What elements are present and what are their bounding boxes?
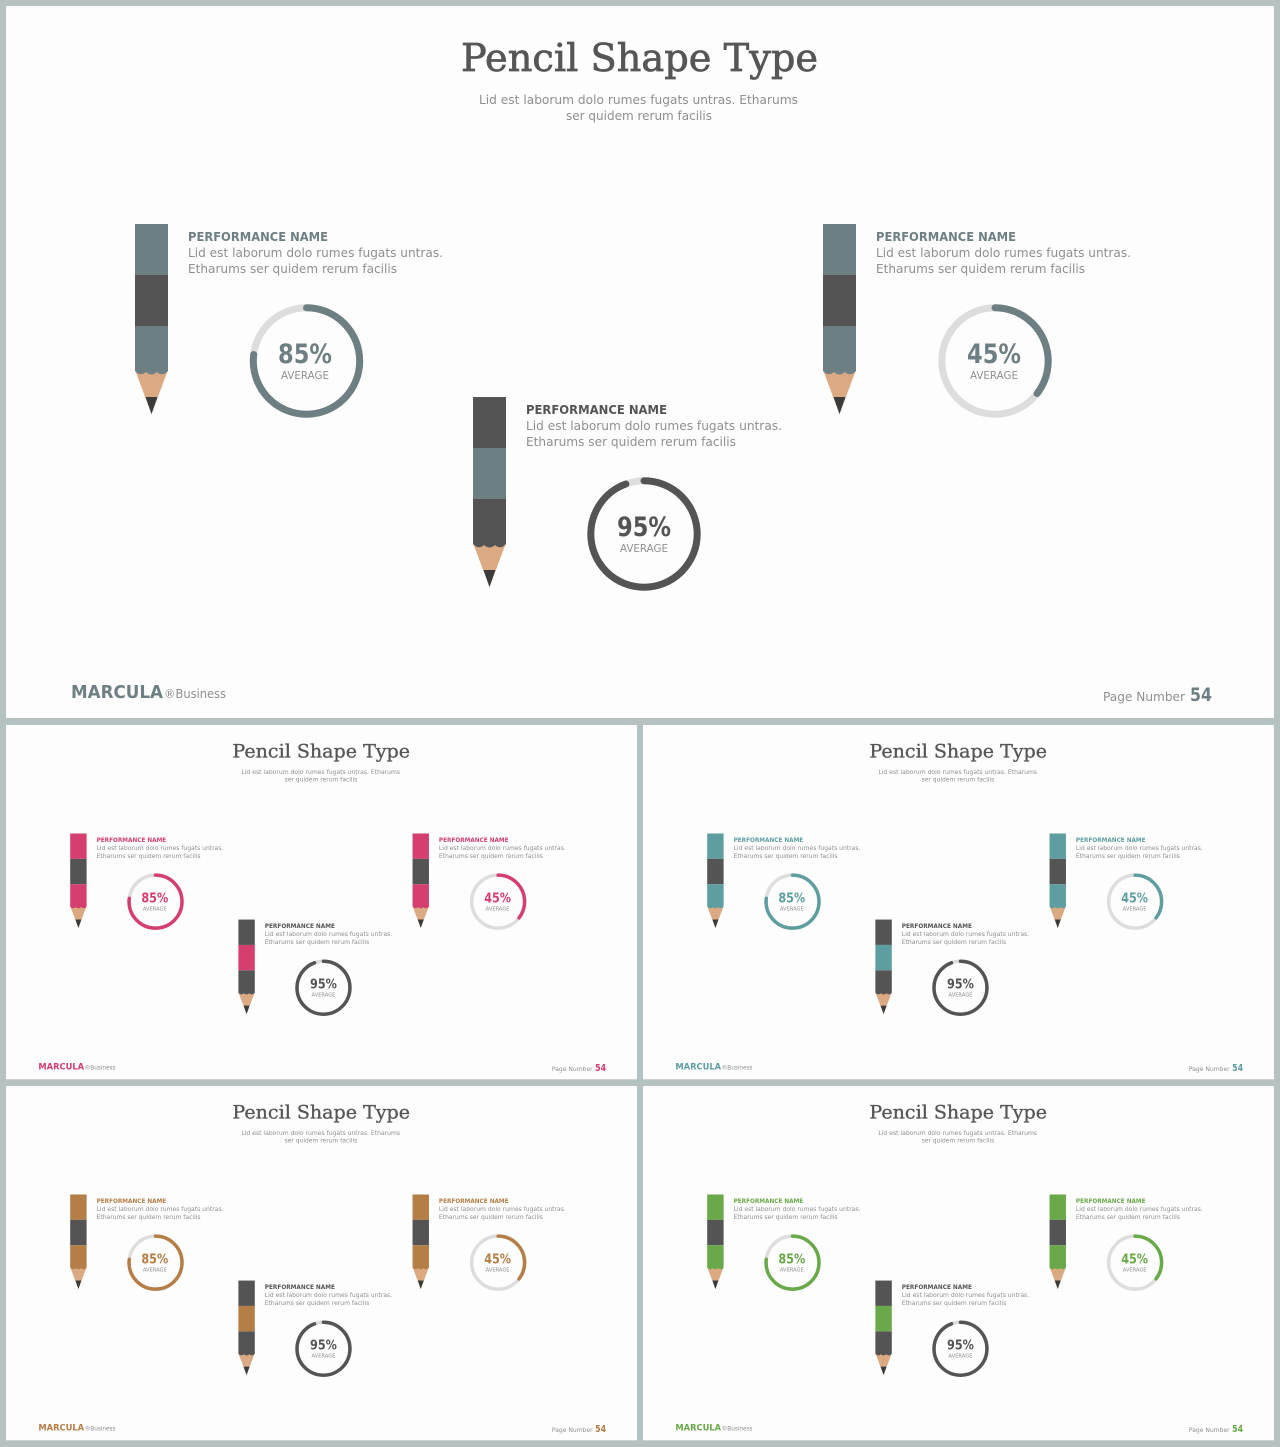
icon: pencil left (135, 224, 168, 414)
text block: performance center: Lid est laborum dolo rumes fugats untras. (265, 1292, 392, 1299)
chart: ring 95% (591, 481, 697, 587)
panel: green slide (643, 1086, 1274, 1440)
chart: ring 95%: 95% (310, 978, 337, 993)
icon: pencil right (823, 224, 856, 414)
text block: performance right: PERFORMANCE NAME (876, 230, 1016, 244)
page number: Page Number (1103, 689, 1186, 704)
chart: ring 85% (766, 875, 819, 928)
text block: performance center (265, 923, 392, 946)
icon: pencil left (70, 833, 87, 928)
chart: ring 95%: 95% (947, 978, 974, 993)
chart: ring 45%: 45% (1121, 1253, 1149, 1268)
text block: performance right: Lid est laborum dolo rumes fugats untras. (876, 245, 1131, 260)
subtitle: ser quidem rerum facilis (285, 1138, 357, 1145)
logo (675, 1062, 752, 1072)
logo: MARCULA (71, 682, 163, 703)
text block: performance left: PERFORMANCE NAME (734, 837, 803, 844)
page number: 54 (595, 1424, 606, 1435)
text block: performance right: Etharums ser quidem rerum facilis (876, 261, 1085, 276)
logo: MARCULA (675, 1062, 721, 1072)
chart: ring 45% (1109, 1236, 1162, 1289)
page number (1189, 1424, 1243, 1435)
icon: pencil center (238, 920, 255, 1014)
logo: ®Business (85, 1424, 115, 1432)
logo (675, 1423, 752, 1433)
title: Pencil Shape Type (869, 740, 1047, 762)
text block: performance right (1076, 1198, 1203, 1221)
logo: ®Business (85, 1063, 115, 1071)
text block: performance left: PERFORMANCE NAME (734, 1198, 803, 1205)
text block: performance right: Lid est laborum dolo rumes fugats untras. (1076, 1206, 1203, 1213)
chart: ring 45% (942, 308, 1048, 414)
text block: performance left (188, 230, 443, 276)
title: Pencil Shape Type (232, 1101, 410, 1123)
text block: performance center: Etharums ser quidem rerum facilis (902, 1300, 1006, 1307)
text block: performance right: PERFORMANCE NAME (1076, 837, 1146, 844)
text block: performance left (97, 837, 223, 860)
logo: MARCULA (38, 1423, 84, 1433)
chart: ring 85%: AVERAGE (143, 907, 167, 913)
chart: ring 45%: AVERAGE (1123, 907, 1147, 913)
text block: performance right: Lid est laborum dolo rumes fugats untras. (1076, 845, 1203, 852)
chart: ring 45%: AVERAGE (486, 907, 510, 913)
chart: ring 45%: 45% (967, 339, 1021, 370)
subtitle: Lid est laborum dolo rumes fugats untras. Etharums (878, 769, 1037, 776)
chart: ring 85%: AVERAGE (143, 1268, 167, 1274)
icon: pencil left (707, 1194, 724, 1289)
chart: ring 85%: AVERAGE (281, 369, 329, 382)
chart: ring 85% (766, 1236, 819, 1289)
text block: performance left: PERFORMANCE NAME (97, 837, 166, 844)
logo (38, 1062, 115, 1072)
text block: performance center (902, 923, 1029, 946)
chart: ring 95%: 95% (617, 512, 671, 543)
chart: ring 45% (472, 875, 525, 928)
chart: ring 95%: AVERAGE (312, 993, 336, 999)
text block: performance left: PERFORMANCE NAME (97, 1198, 166, 1205)
chart: ring 85%: AVERAGE (780, 907, 804, 913)
text block: performance left (734, 1198, 860, 1221)
text block: performance left: Etharums ser quidem rerum facilis (97, 853, 201, 860)
text block: performance right: Lid est laborum dolo rumes fugats untras. (439, 1206, 566, 1213)
page number: Page Number (552, 1066, 593, 1073)
text block: performance right: Etharums ser quidem rerum facilis (439, 1214, 543, 1221)
page number: Page Number (1189, 1427, 1230, 1434)
title: Pencil Shape Type (461, 36, 818, 80)
text block: performance right: Lid est laborum dolo rumes fugats untras. (439, 845, 566, 852)
icon: pencil center (875, 1281, 892, 1375)
page number: 54 (1232, 1424, 1243, 1435)
logo (38, 1423, 115, 1433)
text block: performance center (526, 403, 782, 449)
chart: ring 85%: 85% (278, 339, 332, 370)
chart: ring 85% (129, 875, 182, 928)
text block: performance center: Etharums ser quidem rerum facilis (902, 939, 1006, 946)
subtitle: ser quidem rerum facilis (566, 108, 712, 123)
text block: performance left: Etharums ser quidem rerum facilis (734, 853, 838, 860)
icon: pencil center (473, 397, 506, 587)
subtitle: Lid est laborum dolo rumes fugats untras. Etharums (241, 769, 400, 776)
chart: ring 95%: AVERAGE (949, 1354, 973, 1360)
text block: performance center: Etharums ser quidem rerum facilis (265, 1300, 369, 1307)
chart: ring 95% (934, 961, 987, 1014)
text block: performance center (902, 1284, 1029, 1307)
panel: teal slide (643, 725, 1274, 1079)
chart: ring 45%: AVERAGE (486, 1268, 510, 1274)
chart: ring 45% (1109, 875, 1162, 928)
subtitle (241, 1130, 400, 1145)
subtitle (878, 769, 1037, 784)
page number: Page Number (552, 1427, 593, 1434)
page number: 54 (1232, 1063, 1243, 1074)
logo: ®Business (722, 1063, 752, 1071)
chart: ring 45%: 45% (484, 892, 512, 907)
chart: ring 45%: AVERAGE (970, 369, 1018, 382)
title: Pencil Shape Type (232, 740, 410, 762)
text block: performance left: Lid est laborum dolo rumes fugats untras. (734, 1206, 860, 1213)
chart: ring 95%: AVERAGE (312, 1354, 336, 1360)
page number (552, 1063, 606, 1074)
logo: ®Business (164, 686, 226, 701)
text block: performance right: Etharums ser quidem rerum facilis (1076, 1214, 1180, 1221)
page number: 54 (1190, 684, 1212, 706)
subtitle: ser quidem rerum facilis (922, 1138, 994, 1145)
chart: ring 45%: 45% (484, 1253, 512, 1268)
icon: pencil right (413, 833, 429, 928)
chart: ring 85%: 85% (141, 1253, 169, 1268)
text block: performance center: Etharums ser quidem rerum facilis (265, 939, 369, 946)
text block: performance right (439, 1198, 566, 1221)
chart: ring 85%: AVERAGE (780, 1268, 804, 1274)
text block: performance center (265, 1284, 392, 1307)
subtitle (878, 1130, 1037, 1145)
text block: performance right: Etharums ser quidem rerum facilis (439, 853, 543, 860)
text block: performance center: Etharums ser quidem rerum facilis (526, 434, 736, 449)
text block: performance right: PERFORMANCE NAME (439, 1198, 509, 1205)
text block: performance right: PERFORMANCE NAME (439, 837, 509, 844)
text block: performance left: Lid est laborum dolo rumes fugats untras. (97, 1206, 223, 1213)
chart: ring 95%: AVERAGE (949, 993, 973, 999)
page number (1189, 1063, 1243, 1074)
text block: performance center: Lid est laborum dolo rumes fugats untras. (265, 931, 392, 938)
text block: performance left: Etharums ser quidem rerum facilis (97, 1214, 201, 1221)
chart: ring 85% (129, 1236, 182, 1289)
text block: performance left: Lid est laborum dolo rumes fugats untras. (97, 845, 223, 852)
logo: MARCULA (675, 1423, 721, 1433)
chart: ring 95%: 95% (947, 1339, 974, 1354)
icon: pencil right (1050, 1194, 1066, 1289)
icon: pencil left (70, 1194, 87, 1289)
panel: main slide (6, 6, 1274, 718)
chart: ring 95%: AVERAGE (620, 542, 668, 555)
logo (71, 682, 226, 703)
icon: pencil right (1050, 833, 1066, 928)
text block: performance left: Lid est laborum dolo rumes fugats untras. (734, 845, 860, 852)
title: Pencil Shape Type (869, 1101, 1047, 1123)
text block: performance center: Lid est laborum dolo rumes fugats untras. (902, 931, 1029, 938)
text block: performance right: Etharums ser quidem rerum facilis (1076, 853, 1180, 860)
chart: ring 85%: 85% (141, 892, 169, 907)
panel: pink slide (6, 725, 637, 1079)
chart: ring 95%: 95% (310, 1339, 337, 1354)
chart: ring 85%: 85% (778, 892, 806, 907)
text block: performance center: PERFORMANCE NAME (526, 403, 667, 417)
text block: performance center: PERFORMANCE NAME (902, 1284, 972, 1291)
page number: Page Number (1189, 1066, 1230, 1073)
text block: performance left (97, 1198, 223, 1221)
subtitle (241, 769, 400, 784)
text block: performance right (1076, 837, 1203, 860)
text block: performance center: PERFORMANCE NAME (265, 1284, 335, 1291)
subtitle (479, 92, 798, 123)
text block: performance left: Etharums ser quidem rerum facilis (734, 1214, 838, 1221)
chart: ring 45% (472, 1236, 525, 1289)
text block: performance center: Lid est laborum dolo rumes fugats untras. (526, 418, 782, 433)
chart: ring 45%: 45% (1121, 892, 1149, 907)
text block: performance left (734, 837, 860, 860)
subtitle: Lid est laborum dolo rumes fugats untras. Etharums (878, 1130, 1037, 1137)
chart: ring 45%: AVERAGE (1123, 1268, 1147, 1274)
subtitle: ser quidem rerum facilis (285, 777, 357, 784)
icon: pencil left (707, 833, 724, 928)
text block: performance left: PERFORMANCE NAME (188, 230, 328, 244)
text block: performance right: PERFORMANCE NAME (1076, 1198, 1146, 1205)
text block: performance center: PERFORMANCE NAME (902, 923, 972, 930)
page number (552, 1424, 606, 1435)
icon: pencil center (238, 1281, 255, 1375)
page number: 54 (595, 1063, 606, 1074)
text block: performance center: PERFORMANCE NAME (265, 923, 335, 930)
text block: performance right (876, 230, 1131, 276)
panel: brown slide (6, 1086, 637, 1440)
text block: performance left: Etharums ser quidem rerum facilis (188, 261, 397, 276)
page number (1103, 684, 1212, 706)
subtitle: ser quidem rerum facilis (922, 777, 994, 784)
icon: pencil right (413, 1194, 429, 1289)
icon: pencil center (875, 920, 892, 1014)
chart: ring 95% (297, 961, 350, 1014)
chart: ring 85% (253, 308, 360, 414)
text block: performance center: Lid est laborum dolo rumes fugats untras. (902, 1292, 1029, 1299)
text block: performance left: Lid est laborum dolo rumes fugats untras. (188, 245, 443, 260)
chart: ring 85%: 85% (778, 1253, 806, 1268)
text block: performance right (439, 837, 566, 860)
chart: ring 95% (934, 1322, 987, 1375)
chart: ring 95% (297, 1322, 350, 1375)
subtitle: Lid est laborum dolo rumes fugats untras. Etharums (241, 1130, 400, 1137)
logo: ®Business (722, 1424, 752, 1432)
subtitle: Lid est laborum dolo rumes fugats untras. Etharums (479, 92, 798, 107)
logo: MARCULA (38, 1062, 84, 1072)
